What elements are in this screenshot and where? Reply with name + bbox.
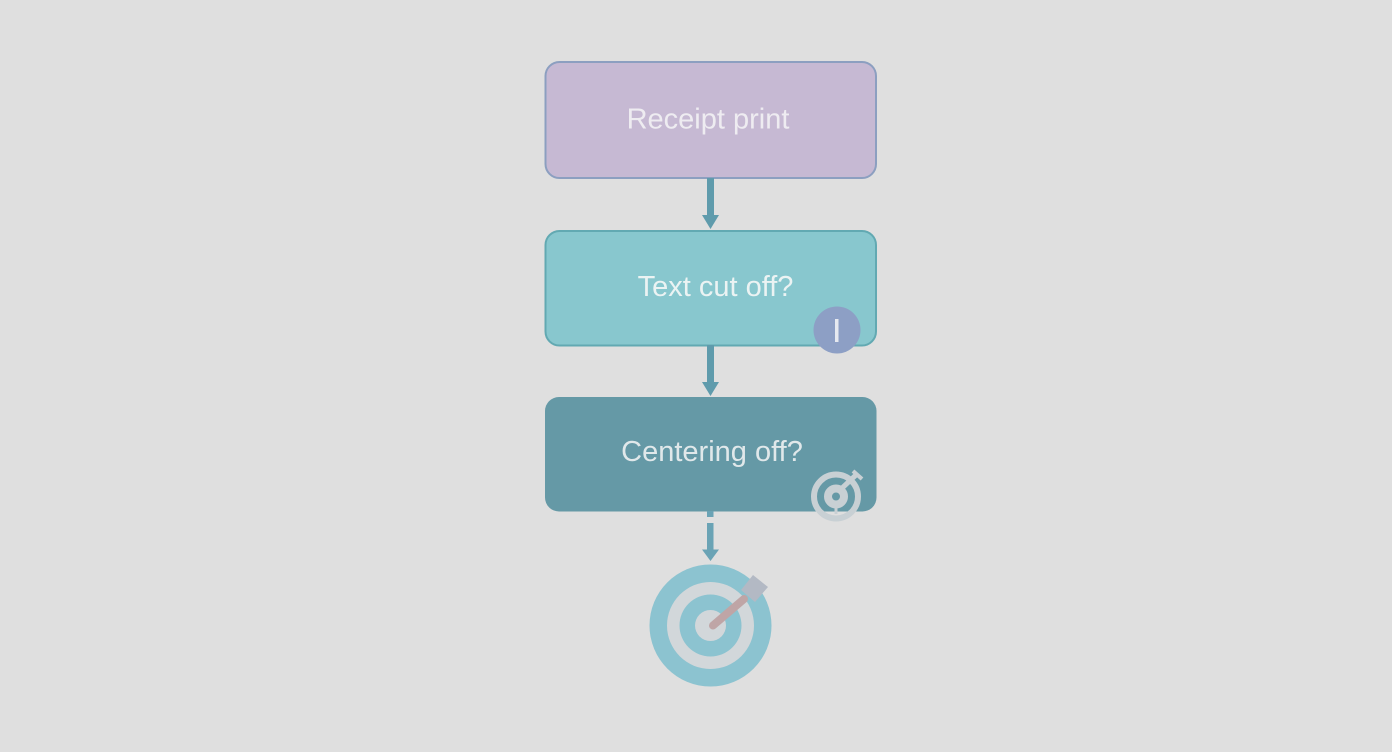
- arrow: dashed connector to target: [702, 511, 719, 561]
- step box: text cut off: [546, 231, 876, 346]
- step box: centering off: Centering off?: [621, 436, 803, 468]
- icon: small target badge: [814, 471, 862, 518]
- step box: text cut off: Text cut off?: [638, 271, 793, 303]
- step box: receipt print: Receipt print: [627, 104, 789, 136]
- icon: info badge: [814, 306, 860, 354]
- icon: large target with dart: [650, 564, 772, 686]
- step box: centering off: [545, 397, 876, 512]
- arrow: text cut off to centering off: [702, 345, 719, 396]
- step box: receipt print: [546, 62, 876, 178]
- arrow: receipt to text cut off: [702, 178, 719, 229]
- flowchart: [545, 62, 876, 686]
